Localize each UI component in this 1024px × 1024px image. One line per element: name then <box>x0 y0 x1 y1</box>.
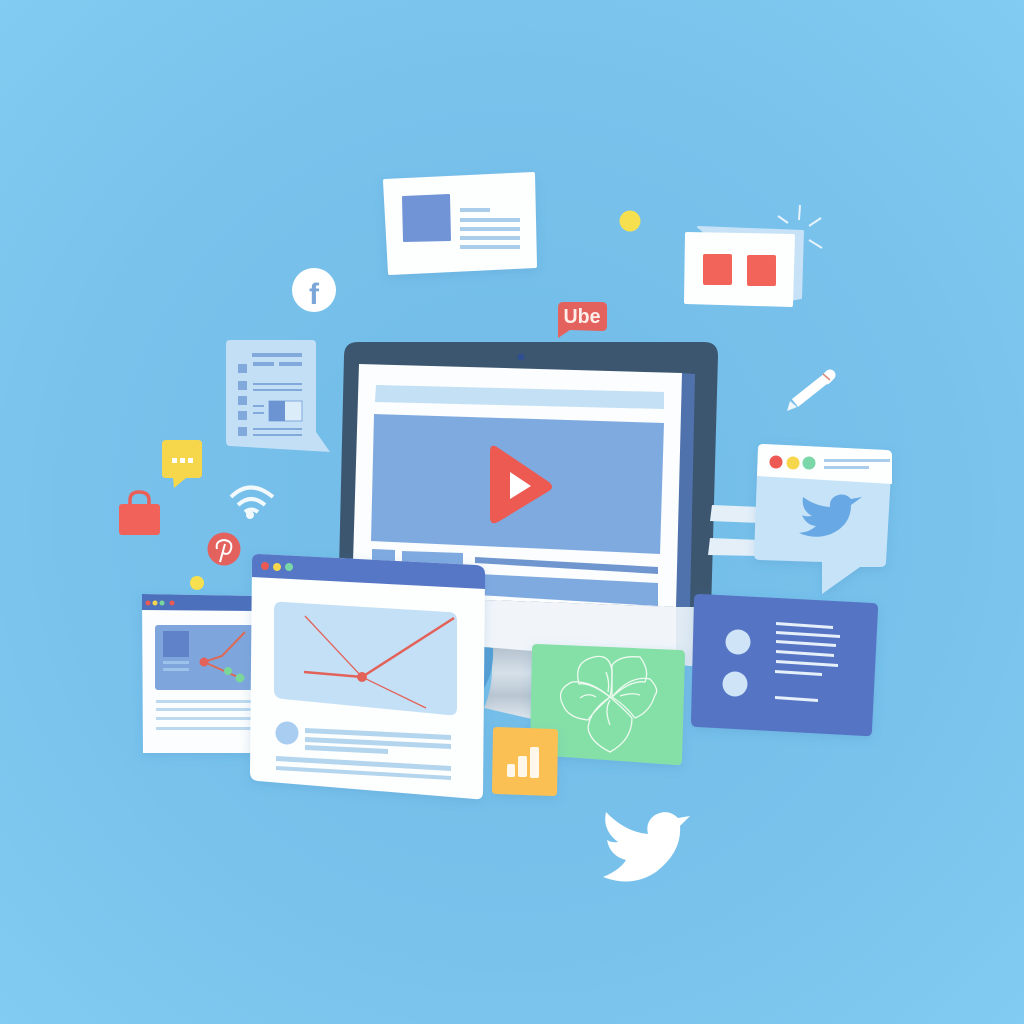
dark blue panel <box>691 594 878 736</box>
monitor <box>338 342 718 722</box>
icon: yellow chat <box>162 440 202 488</box>
icon: pinterest <box>208 532 240 566</box>
youtube tag <box>558 302 607 338</box>
yellow dot small <box>190 576 204 590</box>
document panel <box>226 340 330 452</box>
icon: pencil <box>787 374 830 411</box>
twitter browser bubble <box>754 444 892 594</box>
blue lines connectors <box>708 505 760 556</box>
icon: facebook: f <box>309 278 320 311</box>
icon: wifi <box>231 488 273 517</box>
green flower card <box>530 644 685 765</box>
top article card <box>385 174 535 273</box>
main chart browser <box>250 554 485 799</box>
yellow dot <box>620 210 640 232</box>
youtube tag: Ube <box>564 306 600 328</box>
icon: facebook <box>292 268 336 312</box>
red squares card <box>686 205 822 305</box>
icon: red lock <box>119 492 160 535</box>
left small browser <box>142 594 255 753</box>
monitor stand <box>484 647 545 722</box>
play button <box>490 446 552 523</box>
monitor chin <box>352 595 694 666</box>
icon: white twitter bird <box>603 812 690 881</box>
orange chart tile <box>492 727 558 796</box>
